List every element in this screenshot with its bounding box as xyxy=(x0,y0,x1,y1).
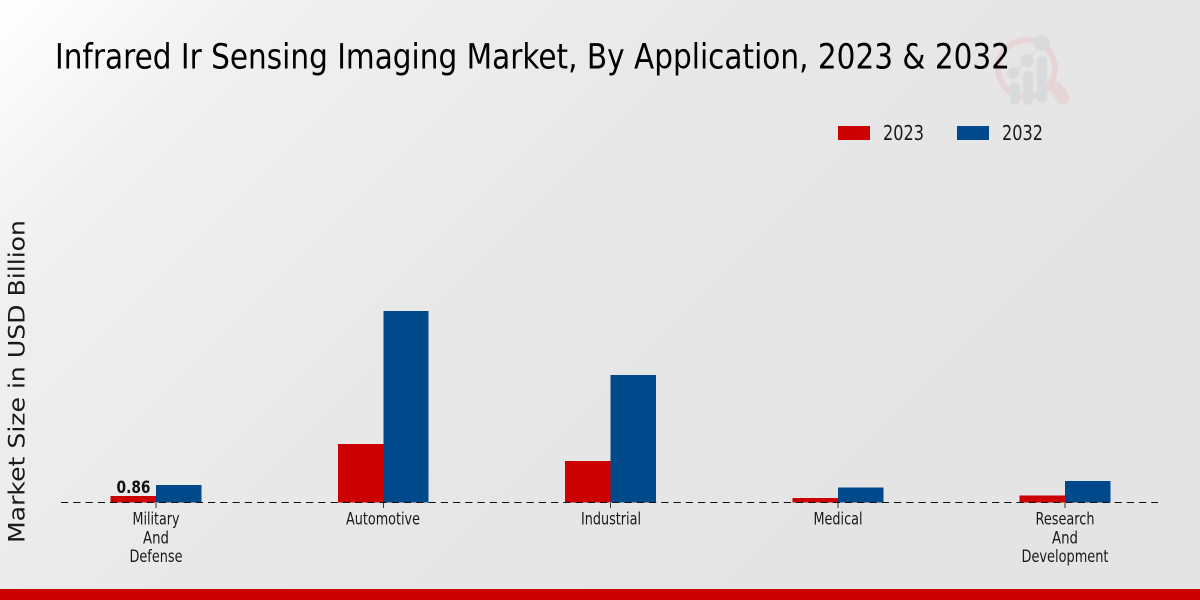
category label: Military And Defense xyxy=(130,510,182,566)
title: Infrared Ir Sensing Imaging Market, By Application, 2023 & 2032 xyxy=(55,38,1010,78)
category label: Industrial: Industrial xyxy=(581,510,641,528)
category label: Military And Defense: Military xyxy=(132,510,180,528)
legend item: 2032 xyxy=(957,121,1043,145)
category label: Automotive: Automotive xyxy=(346,510,420,528)
bar chart xyxy=(61,311,1158,566)
category label: Military And Defense: And xyxy=(143,528,169,548)
x-axis baseline xyxy=(61,502,1158,504)
legend xyxy=(838,121,1043,145)
legend item: 2032: 2032 xyxy=(1002,121,1043,145)
category label: Research And Development xyxy=(1022,510,1109,566)
category label: Research And Development: Development xyxy=(1022,547,1109,566)
footer band xyxy=(0,589,1200,600)
data label: 0.86: 0.86 xyxy=(116,478,150,497)
y-axis title: Market Size in USD Billion xyxy=(6,220,30,543)
axis ticks xyxy=(156,503,1065,508)
category label: Military And Defense: Defense xyxy=(130,547,182,566)
bars: Medical xyxy=(792,488,884,502)
icon: magnifier watermark logo xyxy=(998,35,1063,105)
category label: Research And Development: Research xyxy=(1036,510,1094,528)
bars: Military And Defense xyxy=(110,485,202,502)
bars: Research And Development xyxy=(1020,481,1110,502)
legend item: 2023: 2023 xyxy=(883,121,924,145)
category label: Medical: Medical xyxy=(814,510,862,528)
legend item: 2023 xyxy=(838,121,924,145)
bars: Automotive xyxy=(338,311,428,502)
bars: Industrial xyxy=(565,375,656,502)
category label: Research And Development: And xyxy=(1052,528,1078,548)
